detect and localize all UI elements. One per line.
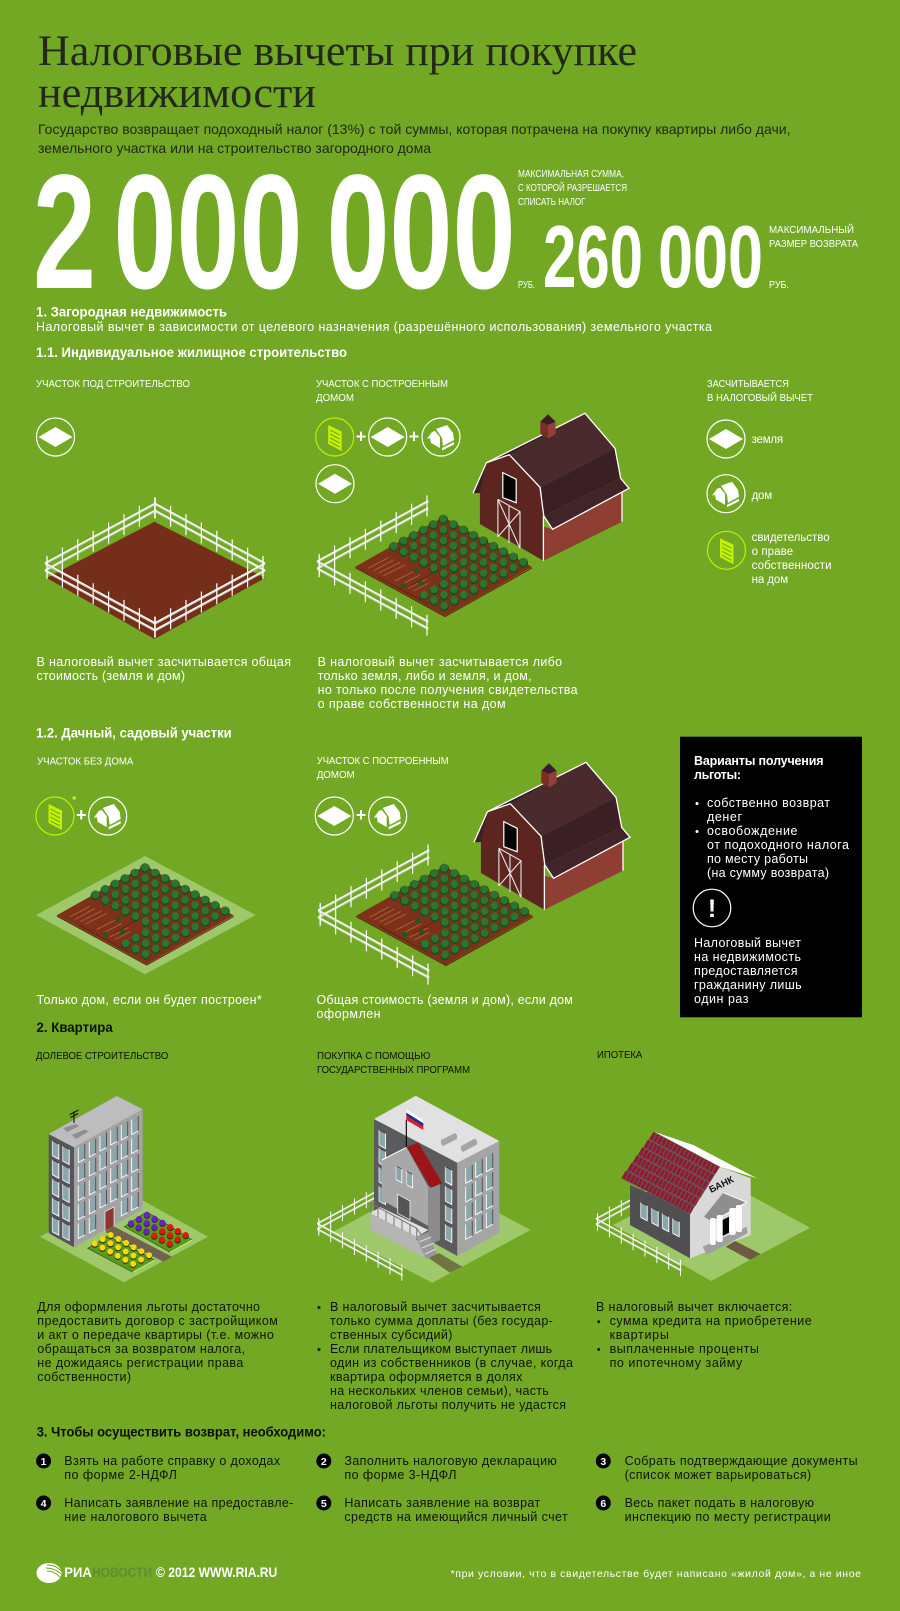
step 5: средств на имеющийся личный счет (344, 1510, 568, 1524)
box note: предоставляется (694, 964, 798, 978)
icon: exclamation: ! (708, 895, 716, 923)
panel: plot without house (36, 756, 262, 1007)
icon: land (36, 418, 74, 456)
panel: mortgage (596, 1050, 812, 1370)
description (318, 1300, 573, 1412)
label: ДОМОМ (317, 770, 355, 781)
illustration: bank building: БАНК (707, 1174, 736, 1196)
description (36, 655, 291, 683)
icons: certificate + house: + (76, 805, 87, 825)
label: УЧАСТОК БЕЗ ДОМА (37, 756, 134, 767)
description: и акт о передаче квартиры (т.е. можно (37, 1328, 274, 1342)
illustration: fence (317, 495, 428, 636)
label: УЧАСТОК С ПОСТРОЕННЫМ (317, 756, 449, 767)
title (38, 28, 637, 117)
description: ственных субсидий) (330, 1328, 452, 1342)
description: не дожидаясь регистрации права (37, 1356, 243, 1370)
description: В налоговый вычет засчитывается общая (36, 655, 291, 669)
illustration: fenced empty plot (45, 497, 265, 639)
big number: 260 000: 000 (658, 207, 763, 306)
step 6 (596, 1496, 831, 1524)
box list: по месту работы (707, 852, 808, 866)
illustration: apartment block with flower beds (40, 1096, 208, 1282)
caption: maximum refund: МАКСИМАЛЬНЫЙ (769, 223, 854, 236)
big number: 2 000 000: 2 (33, 140, 96, 323)
step 1: по форме 2-НДФЛ (64, 1468, 177, 1482)
panel: state programmes (317, 1051, 573, 1412)
caption: maximum sum: МАКСИМАЛЬНАЯ СУММА, (518, 169, 624, 180)
description: о праве собственности на дом (318, 697, 506, 711)
step 1: Взять на работе справку о доходах (64, 1454, 281, 1468)
label: ПОКУПКА С ПОМОЩЬЮ (317, 1051, 430, 1062)
description: собственности) (37, 1370, 131, 1384)
step 6: 6 (600, 1498, 606, 1510)
step 3: 3 (600, 1456, 606, 1468)
step 2: Заполнить налоговую декларацию (344, 1454, 557, 1468)
label: В НАЛОГОВЫЙ ВЫЧЕТ (707, 391, 813, 404)
step 2 (316, 1454, 557, 1482)
box list: денег (707, 810, 742, 824)
description: по ипотечному займу (610, 1356, 743, 1370)
step 5 (316, 1496, 568, 1524)
heading: section 1 (36, 304, 712, 334)
description: на нескольких членов семьи), часть (330, 1384, 549, 1398)
heading: section 1: 1. Загородная недвижимость (36, 304, 227, 320)
subtitle: земельного участка или на строительство загородного дома (38, 140, 431, 156)
description: налоговой льготы получить не удастся (330, 1398, 566, 1412)
description (316, 993, 573, 1021)
logo: RIA Novosti: РИА (64, 1564, 92, 1580)
label: ДОМОМ (316, 393, 354, 404)
legend: certificate: о праве (752, 546, 793, 558)
illustration: barn (473, 413, 629, 561)
heading: 1.1: 1.1. Индивидуальное жилищное строительство (36, 344, 347, 360)
subtitle: Государство возвращает подоходный налог (13%) с той суммы, которая потрачена на покупку квартиры либо дачи, (38, 121, 790, 137)
big number: 260 000: 260 (543, 207, 643, 306)
description: Если плательщиком выступает лишь (330, 1342, 552, 1356)
description: оформлен (316, 1007, 381, 1021)
step 5: 5 (321, 1498, 327, 1510)
box heading: Варианты получения (694, 754, 824, 768)
description: квартира оформляется в долях (330, 1370, 523, 1384)
caption: maximum sum: СПИСАТЬ НАЛОГ (518, 197, 586, 208)
heading: section 3: 3. Чтобы осуществить возврат, необходимо: (37, 1424, 326, 1440)
box heading: льготы: (694, 768, 741, 782)
description (596, 1300, 812, 1370)
step 1 (36, 1454, 281, 1482)
description: только земля, либо и земля, и дом, (318, 669, 532, 683)
label (707, 379, 813, 404)
description: В налоговый вычет засчитывается (330, 1300, 541, 1314)
box note: один раз (694, 992, 749, 1006)
description: Для оформления льготы достаточно (37, 1300, 260, 1314)
step 4: Написать заявление на предоставле- (64, 1496, 293, 1510)
label (317, 1051, 470, 1076)
heading: section 1: Налоговый вычет в зависимости от целевого назначения (разрешённого использования) земельного участка (36, 320, 712, 334)
legend: certificate: свидетельство (752, 532, 830, 544)
label (317, 756, 449, 781)
description: Только дом, если он будет построен* (36, 993, 262, 1007)
description: один из собственников (в случае, когда (330, 1356, 573, 1370)
logo: RIA Novosti (36, 1563, 277, 1583)
illustration: bank building (596, 1132, 810, 1281)
legend: house: дом (752, 490, 772, 502)
description: но только после получения свидетельства (318, 683, 578, 697)
big number: 260 000 (543, 207, 763, 306)
label: ИПОТЕКА (597, 1050, 643, 1061)
step 2: 2 (321, 1456, 327, 1468)
step 4 (36, 1496, 293, 1524)
caption: maximum sum (518, 169, 627, 291)
box note: на недвижимость (694, 950, 801, 964)
icons: certificate + land + house: + (409, 426, 419, 446)
description: стоимость (земля и дом) (36, 669, 185, 683)
panel: shared construction (36, 1051, 278, 1384)
description (318, 655, 578, 711)
legend: land (707, 420, 783, 458)
caption: maximum refund (769, 223, 858, 291)
subtitle (38, 121, 790, 156)
label: ГОСУДАРСТВЕННЫХ ПРОГРАММ (317, 1065, 470, 1076)
step 1: 1 (41, 1456, 47, 1468)
icons: certificate + house (36, 796, 127, 835)
step 6: инспекцию по месту регистрации (625, 1510, 831, 1524)
description: В налоговый вычет включается: (596, 1300, 792, 1314)
label: ДОЛЕВОЕ СТРОИТЕЛЬСТВО (36, 1051, 169, 1062)
step 3 (596, 1454, 858, 1482)
title: Налоговые вычеты при покупке (38, 28, 637, 75)
panel: plot with house 2 (315, 756, 630, 1021)
label: УЧАСТОК ПОД СТРОИТЕЛЬСТВО (36, 379, 190, 390)
step 6: Весь пакет подать в налоговую (625, 1496, 814, 1510)
icon: land alternative (316, 465, 354, 503)
step 2: по форме 3-НДФЛ (344, 1468, 456, 1482)
caption: maximum refund: РАЗМЕР ВОЗВРАТА (769, 239, 858, 250)
box list: от подоходного налога (707, 838, 849, 852)
label: ЗАСЧИТЫВАЕТСЯ (707, 379, 789, 390)
legend: certificate: на дом (752, 574, 788, 586)
step 4: ние налогового вычета (64, 1510, 207, 1524)
heading: section 2: 2. Квартира (36, 1019, 113, 1035)
footnote: *при условии, что в свидетельстве будет написано «жилой дом», а не иное (451, 1568, 861, 1580)
legend: land: земля (752, 434, 783, 446)
description: предоставить договор с застройщиком (37, 1314, 278, 1328)
illustration: fence, orchard and barn (318, 762, 630, 985)
box heading (694, 754, 824, 782)
panel: plot for construction (36, 379, 291, 683)
description: обращаться за возвратом налога, (37, 1342, 245, 1356)
label: УЧАСТОК С ПОСТРОЕННЫМ (316, 379, 448, 390)
step 3: Собрать подтверждающие документы (625, 1454, 858, 1468)
logo: RIA Novosti: © 2012 WWW.RIA.RU (156, 1564, 277, 1580)
illustration: orchard on light ground (36, 856, 256, 974)
legend: house (707, 475, 772, 513)
steps list (36, 1454, 858, 1524)
box list (696, 796, 849, 880)
panel: legend (707, 379, 832, 586)
box note (694, 936, 802, 1006)
big number: 2 000 000 (33, 140, 516, 323)
illustration: public building with flag (317, 1096, 531, 1283)
icons: land + house (315, 797, 407, 835)
icons: certificate + land + house: + (356, 426, 366, 446)
step 3: (список может варьироваться) (625, 1468, 811, 1482)
illustration: orchard (355, 515, 532, 616)
heading: 1.2: 1.2. Дачный, садовый участки (36, 724, 232, 740)
description: В налоговый вычет засчитывается либо (318, 655, 562, 669)
logo: RIA Novosti: НОВОСТИ (92, 1564, 152, 1580)
box note: Налоговый вычет (694, 936, 801, 950)
caption: maximum refund: РУБ. (769, 280, 789, 291)
description: только сумма доплаты (без государ- (330, 1314, 553, 1328)
box list: (на сумму возврата) (707, 866, 829, 880)
caption: maximum sum: С КОТОРОЙ РАЗРЕШАЕТСЯ (518, 181, 627, 194)
big number: 2 000 000: 000 (326, 140, 516, 323)
step 4: 4 (41, 1498, 47, 1510)
title: недвижимости (38, 70, 316, 117)
panel: black options box (680, 737, 862, 1017)
icons: certificate + land + house (316, 418, 460, 456)
description: сумма кредита на приобретение (610, 1314, 812, 1328)
description (37, 1300, 278, 1384)
step 5: Написать заявление на возврат (344, 1496, 540, 1510)
description: квартиры (610, 1328, 669, 1342)
icons: land + house: + (356, 805, 366, 825)
caption: maximum sum: РУБ. (518, 280, 535, 291)
box list: собственно возврат (707, 796, 830, 810)
legend: certificate: собственности (752, 560, 832, 572)
legend: certificate (708, 531, 832, 586)
big number: 2 000 000: 000 (114, 140, 302, 323)
description: выплаченные проценты (610, 1342, 759, 1356)
description: Общая стоимость (земля и дом), если дом (316, 993, 573, 1007)
box list: освобождение (707, 824, 798, 838)
icon: exclamation (693, 889, 731, 927)
box note: гражданину лишь (694, 978, 802, 992)
label (316, 379, 448, 404)
panel: plot with house (316, 379, 629, 711)
